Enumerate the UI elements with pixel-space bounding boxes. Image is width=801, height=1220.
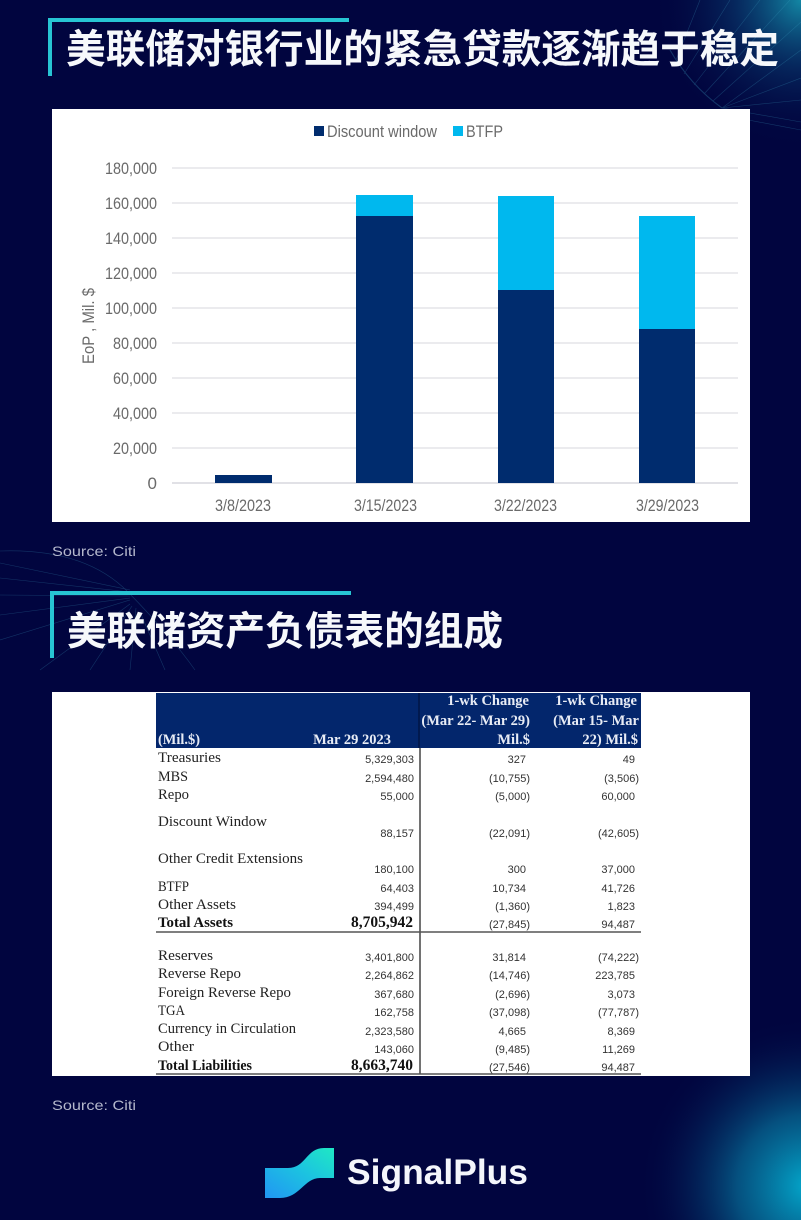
asset rows: 8,705,942 [351,914,413,931]
asset rows: (22,091) [489,828,530,840]
liability rows: 3,401,800 [365,952,414,964]
asset rows: 88,157 [380,828,414,840]
chart legend: Discount window [327,122,438,141]
asset rows: MBS [158,769,188,785]
y axis labels: 160,000 [105,194,157,213]
liability rows: Reverse Repo [158,966,241,982]
liability rows: 367,680 [374,989,414,1001]
chart legend [314,122,503,141]
asset rows: (10,755) [489,773,530,785]
liability rows: 223,785 [595,970,635,982]
asset rows: Treasuries [158,750,221,766]
asset rows: Other Credit Extensions [158,851,303,867]
asset rows: 64,403 [380,883,414,895]
liability rows: 4,665 [498,1026,526,1038]
x axis labels: 3/22/2023 [494,496,557,515]
bars [215,195,695,483]
liability rows: (14,746) [489,970,530,982]
chart legend: BTFP [466,122,503,141]
asset rows: (5,000) [495,791,530,803]
heading: emergency lending: 美联储对银行业的紧急贷款逐渐趋于稳定 [66,28,779,72]
x axis labels: 3/8/2023 [215,496,271,515]
logo: SignalPlus: SignalPlus [347,1153,528,1192]
asset rows: 300 [508,864,526,876]
table header: (Mil.$) [158,732,200,748]
y axis labels: 40,000 [113,404,157,423]
asset rows: 37,000 [601,864,635,876]
liability rows: 3,073 [607,989,635,1001]
table header: (Mar 15- Mar [553,713,640,729]
liability rows: (74,222) [598,952,639,964]
table header: (Mar 22- Mar 29) [421,713,530,729]
asset rows: (27,845) [489,919,530,931]
asset rows: 327 [508,754,526,766]
liability rows: Currency in Circulation [158,1021,297,1037]
liability rows: (2,696) [495,989,530,1001]
asset rows: 55,000 [380,791,414,803]
asset rows: (42,605) [598,828,639,840]
liability rows: 94,487 [601,1062,635,1074]
asset rows: 41,726 [601,883,635,895]
liability rows: (9,485) [495,1044,530,1056]
logo: SignalPlus [265,1148,528,1198]
asset rows: 394,499 [374,901,414,913]
asset rows: BTFP [158,879,189,895]
asset rows: Total Assets [158,915,233,931]
liability rows: 31,814 [492,952,526,964]
liability rows: Reserves [158,948,213,964]
asset rows: 94,487 [601,919,635,931]
icon: logo mark [265,1148,334,1198]
table header: 1-wk Change [555,693,638,709]
asset rows: 1,823 [607,901,635,913]
panel: balance sheet table [52,692,750,1076]
y axis labels: 0 [148,474,157,493]
y axis labels: 60,000 [113,369,157,388]
y axis labels: 80,000 [113,334,157,353]
asset rows: 180,100 [374,864,414,876]
asset rows: (1,360) [495,901,530,913]
x axis labels: 3/15/2023 [354,496,417,515]
y axis labels: 120,000 [105,264,157,283]
asset rows: 10,734 [492,883,526,895]
panel: stacked bar chart [52,109,750,522]
asset rows: Other Assets [158,897,236,913]
liability rows: Other [158,1039,194,1055]
y axis labels: 180,000 [105,159,157,178]
asset rows: 49 [623,754,635,766]
liability rows [158,948,639,1074]
asset rows [158,750,639,931]
asset rows: 5,329,303 [365,754,414,766]
liability rows: (37,098) [489,1007,530,1019]
y axis title: EoP , Mil. $ [79,288,98,364]
liability rows: Total Liabilities [158,1058,252,1074]
liability rows: Foreign Reverse Repo [158,985,291,1001]
liability rows: 8,663,740 [351,1057,413,1074]
asset rows: 2,594,480 [365,773,414,785]
source note 2: Source: Citi [52,1097,136,1113]
table header: Mil.$ [497,732,530,748]
table header [156,693,641,748]
liability rows: 143,060 [374,1044,414,1056]
liability rows: (27,546) [489,1062,530,1074]
heading: balance sheet: 美联储资产负债表的组成 [67,610,503,654]
asset rows: Repo [158,787,189,803]
x axis labels: 3/29/2023 [636,496,699,515]
heading: balance sheet [50,591,503,658]
liability rows: 162,758 [374,1007,414,1019]
y axis labels: 20,000 [113,439,157,458]
liability rows: TGA [158,1003,185,1019]
liability rows: 8,369 [607,1026,635,1038]
source note 1: Source: Citi [52,543,136,559]
table header: Mar 29 2023 [313,732,391,748]
y axis labels: 100,000 [105,299,157,318]
y axis labels [105,159,157,493]
liability rows: 2,264,862 [365,970,414,982]
asset rows: 60,000 [601,791,635,803]
liability rows: 11,269 [602,1044,635,1056]
asset rows: Discount Window [158,814,268,830]
asset rows: (3,506) [604,773,639,785]
x axis labels [215,496,699,515]
liability rows: 2,323,580 [365,1026,414,1038]
table header: 1-wk Change [447,693,530,709]
y axis labels: 140,000 [105,229,157,248]
table header: 22) Mil.$ [582,732,638,748]
liability rows: (77,787) [598,1007,639,1019]
